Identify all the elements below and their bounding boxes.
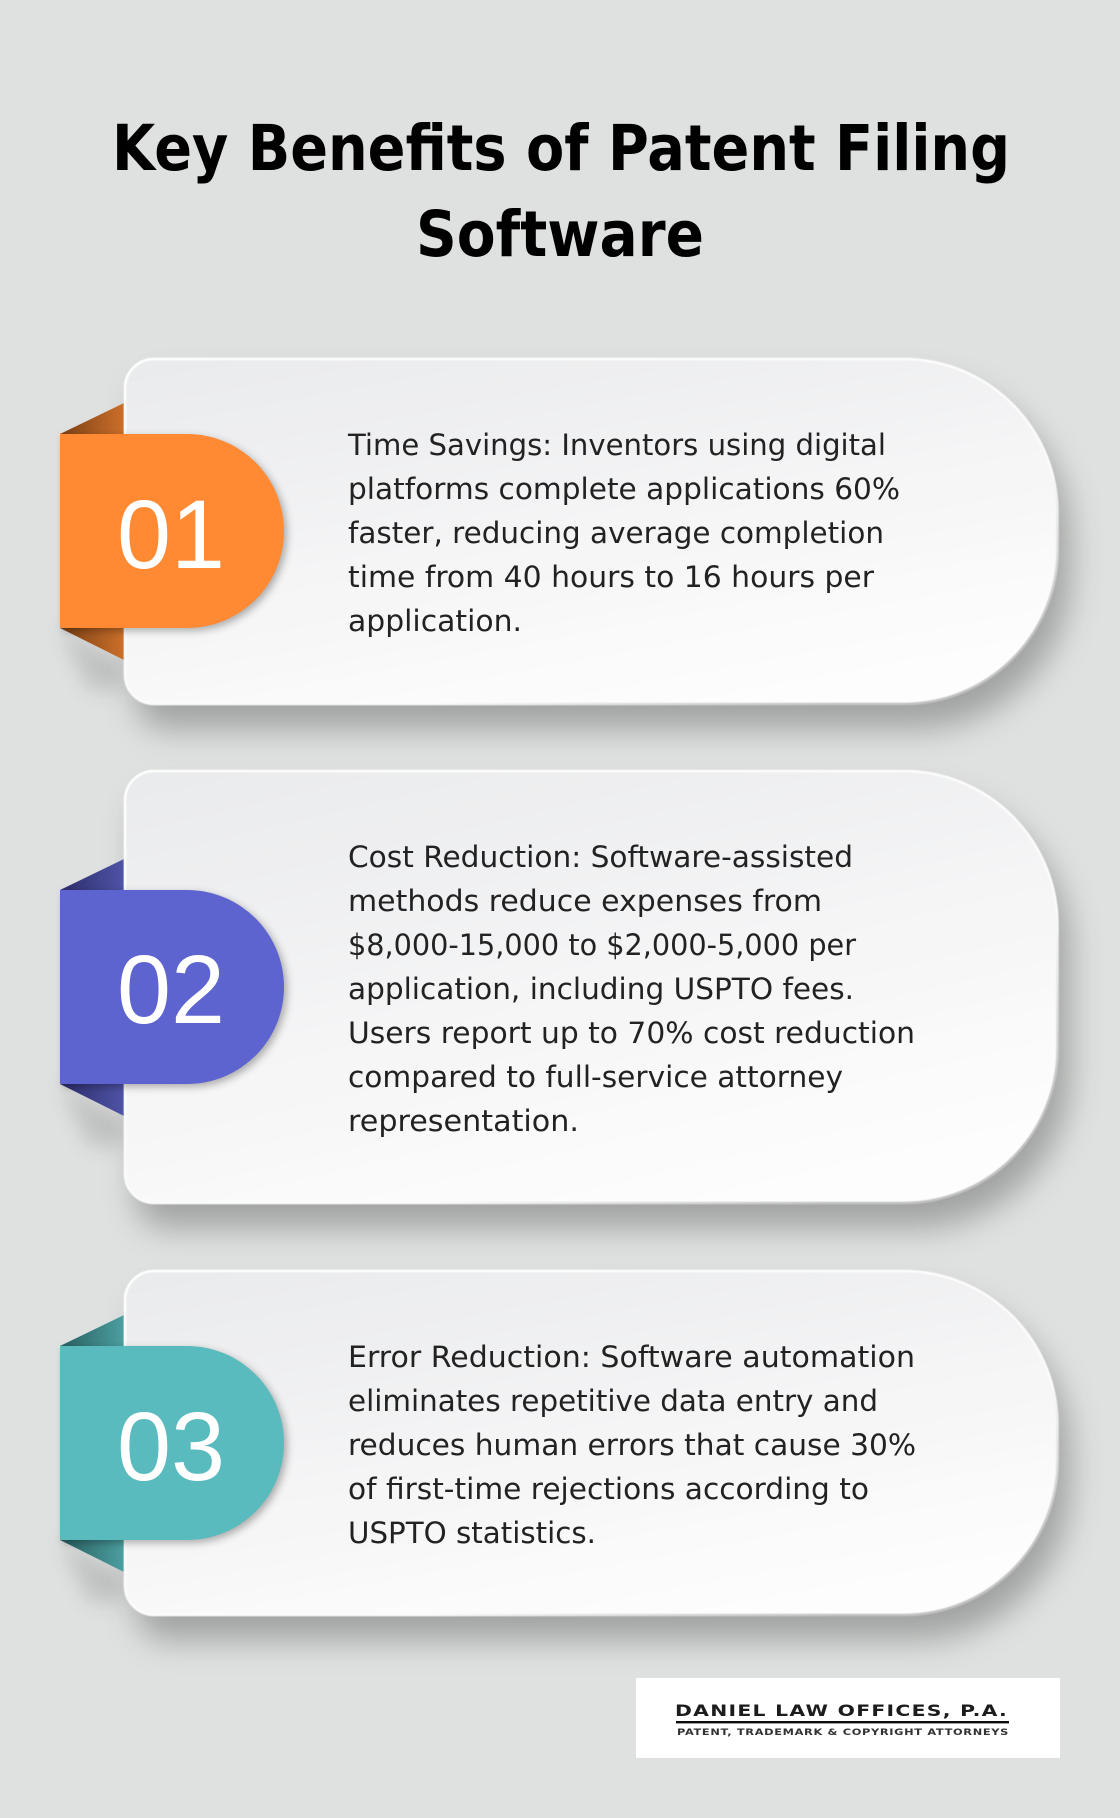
text: cost reduction: compared to full-service attorney bbox=[348, 1060, 843, 1094]
text: time savings: faster, reducing average completion bbox=[348, 516, 884, 550]
title: Software bbox=[416, 198, 704, 271]
fold: orange ribbon bbox=[60, 403, 124, 660]
number badge 02 bbox=[60, 890, 287, 1087]
text: cost reduction: methods reduce expenses from bbox=[348, 884, 822, 918]
text: cost reduction: representation. bbox=[348, 1104, 579, 1138]
text: cost reduction: $8,000-15,000 to $2,000-5,000 per bbox=[348, 928, 857, 962]
text: error reduction: of first-time rejections according to bbox=[348, 1472, 869, 1506]
number badge 02: 02 bbox=[117, 935, 225, 1044]
panel: cost reduction bbox=[60, 771, 1070, 1228]
text: error reduction bbox=[348, 1340, 916, 1550]
number badge 03 bbox=[60, 1346, 287, 1543]
text: cost reduction bbox=[348, 840, 915, 1138]
number badge 01 bbox=[60, 434, 287, 631]
card surface bbox=[125, 1271, 1058, 1615]
text: error reduction: reduces human errors that cause 30% bbox=[348, 1428, 916, 1462]
title: Key Benefits of Patent Filing bbox=[112, 112, 1010, 185]
text: cost reduction: Cost Reduction: Software-assisted bbox=[348, 840, 853, 874]
number badge 01: 01 bbox=[117, 480, 225, 589]
panel: time savings bbox=[60, 359, 1070, 729]
fold: blue ribbon bbox=[60, 859, 124, 1116]
text: error reduction: Error Reduction: Software automation bbox=[348, 1340, 915, 1374]
fold: teal ribbon bbox=[60, 1315, 124, 1572]
text: time savings bbox=[347, 428, 900, 638]
logo: Daniel Law Offices bbox=[636, 1678, 1060, 1758]
text: error reduction: eliminates repetitive data entry and bbox=[348, 1384, 878, 1418]
logo: Daniel Law Offices: DANIEL LAW OFFICES, P.A. bbox=[675, 1701, 1008, 1720]
panel: error reduction bbox=[60, 1271, 1070, 1640]
text: time savings: platforms complete applications 60% bbox=[348, 472, 900, 506]
text: cost reduction: Users report up to 70% cost reduction bbox=[348, 1016, 915, 1050]
title bbox=[112, 112, 1010, 271]
card surface bbox=[125, 359, 1058, 704]
text: cost reduction: application, including USPTO fees. bbox=[348, 972, 854, 1006]
text: time savings: time from 40 hours to 16 hours per bbox=[348, 560, 875, 594]
number badge 03: 03 bbox=[117, 1392, 225, 1501]
logo: Daniel Law Offices: PATENT, TRADEMARK & COPYRIGHT ATTORNEYS bbox=[677, 1728, 1009, 1738]
card surface bbox=[125, 771, 1058, 1203]
text: error reduction: USPTO statistics. bbox=[348, 1516, 596, 1550]
text: time savings: Time Savings: Inventors using digital bbox=[347, 428, 886, 462]
text: time savings: application. bbox=[348, 604, 522, 638]
